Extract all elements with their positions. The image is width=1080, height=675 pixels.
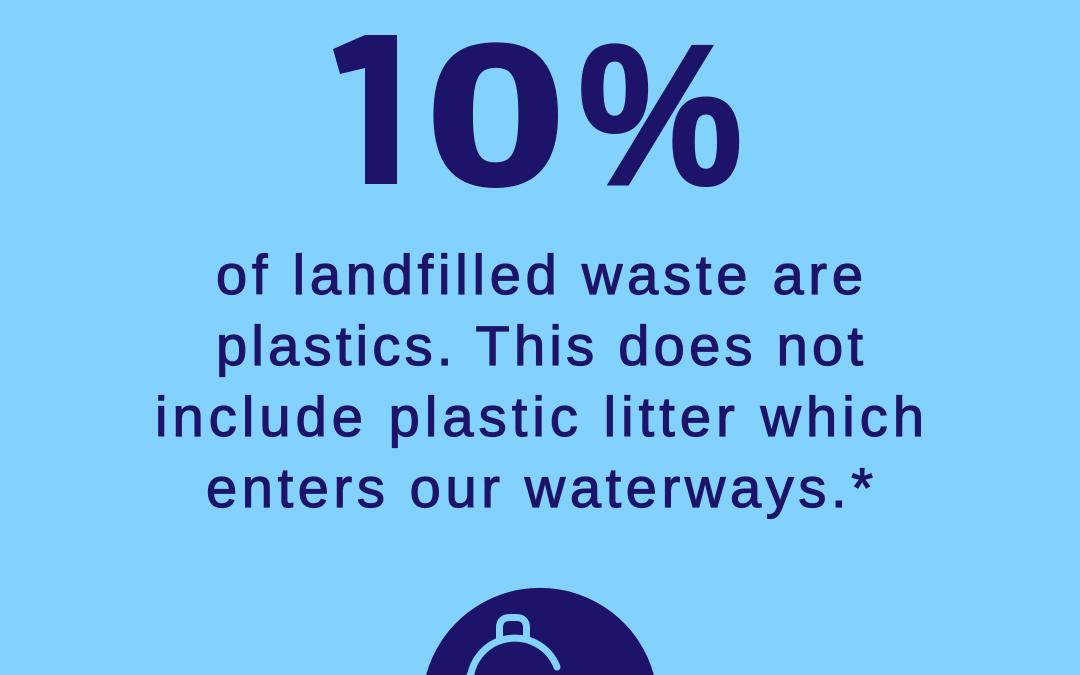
big statistic: 10%: 0 [426,4,566,227]
description text: plastics. This does not [216,314,863,377]
description text: include plastic litter which [155,385,924,448]
big statistic: 10% [333,35,740,188]
description text [155,243,924,519]
description text: enters our waterways.* [206,456,873,519]
icon: plastic bottle in circle [426,588,654,675]
description text: of landfilled waste are [216,243,863,306]
big statistic: 10%: % [578,3,743,227]
big statistic: 10%: 1 [315,3,437,227]
